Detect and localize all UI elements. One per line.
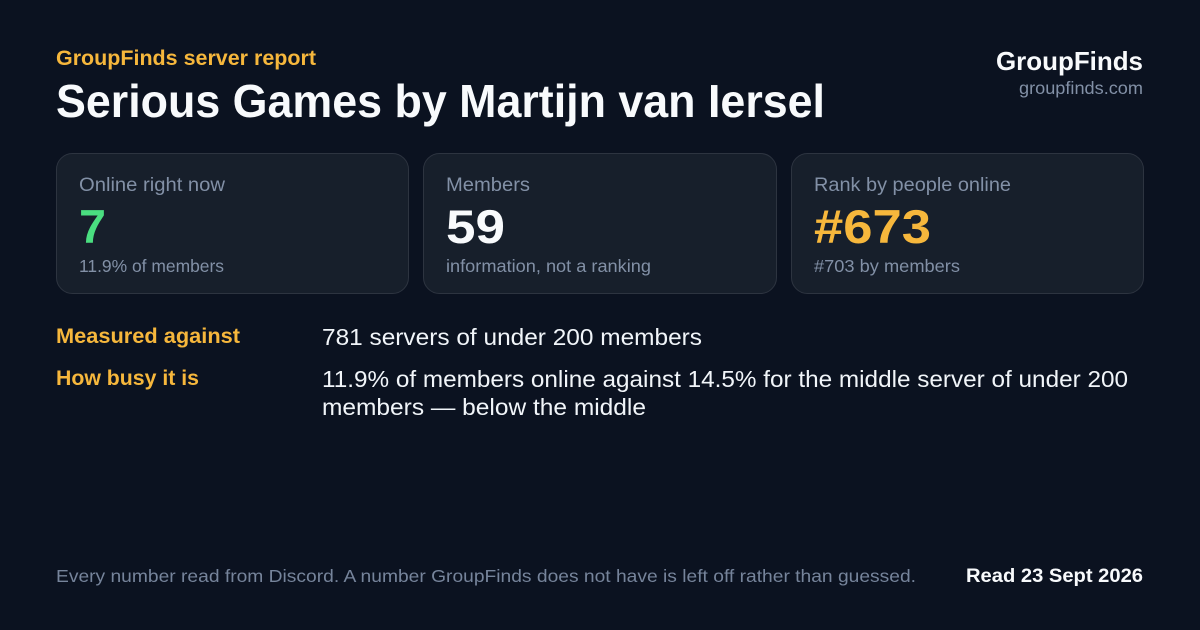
brand: name: GroupFinds — [996, 46, 1143, 76]
header: eyebrow: GroupFinds server report — [56, 46, 316, 70]
value: online: 7 — [79, 200, 106, 253]
note: rank: #703 by members — [814, 256, 960, 276]
value: members: 59 — [446, 200, 505, 253]
brand: url: groupfinds.com — [1019, 78, 1143, 98]
header: title: Serious Games by Martijn van Iersel — [56, 75, 825, 127]
panel: online right now — [56, 154, 408, 294]
note: members: information, not a ranking — [446, 256, 651, 276]
footer: note: Every number read from Discord. A number GroupFinds does not have is left off rather than guessed. — [56, 566, 916, 586]
value: rank: #673 — [814, 200, 931, 253]
row: how busy value: members — below the middle — [322, 394, 646, 420]
note: online: 11.9% of members — [79, 256, 224, 276]
panel: rank — [792, 154, 1144, 294]
panel: members — [424, 154, 776, 294]
label: online: Online right now — [79, 174, 226, 196]
label: members: Members — [446, 174, 530, 196]
footer: date: Read 23 Sept 2026 — [966, 565, 1143, 587]
row: how busy value — [322, 366, 1128, 420]
row: how busy label: How busy it is — [56, 366, 199, 390]
row: how busy value: 11.9% of members online against 14.5% for the middle server of under 200 — [322, 366, 1128, 392]
label: rank: Rank by people online — [814, 174, 1011, 196]
row: measured against label: Measured against — [56, 324, 240, 348]
row: measured against value: 781 servers of under 200 members — [322, 324, 702, 350]
